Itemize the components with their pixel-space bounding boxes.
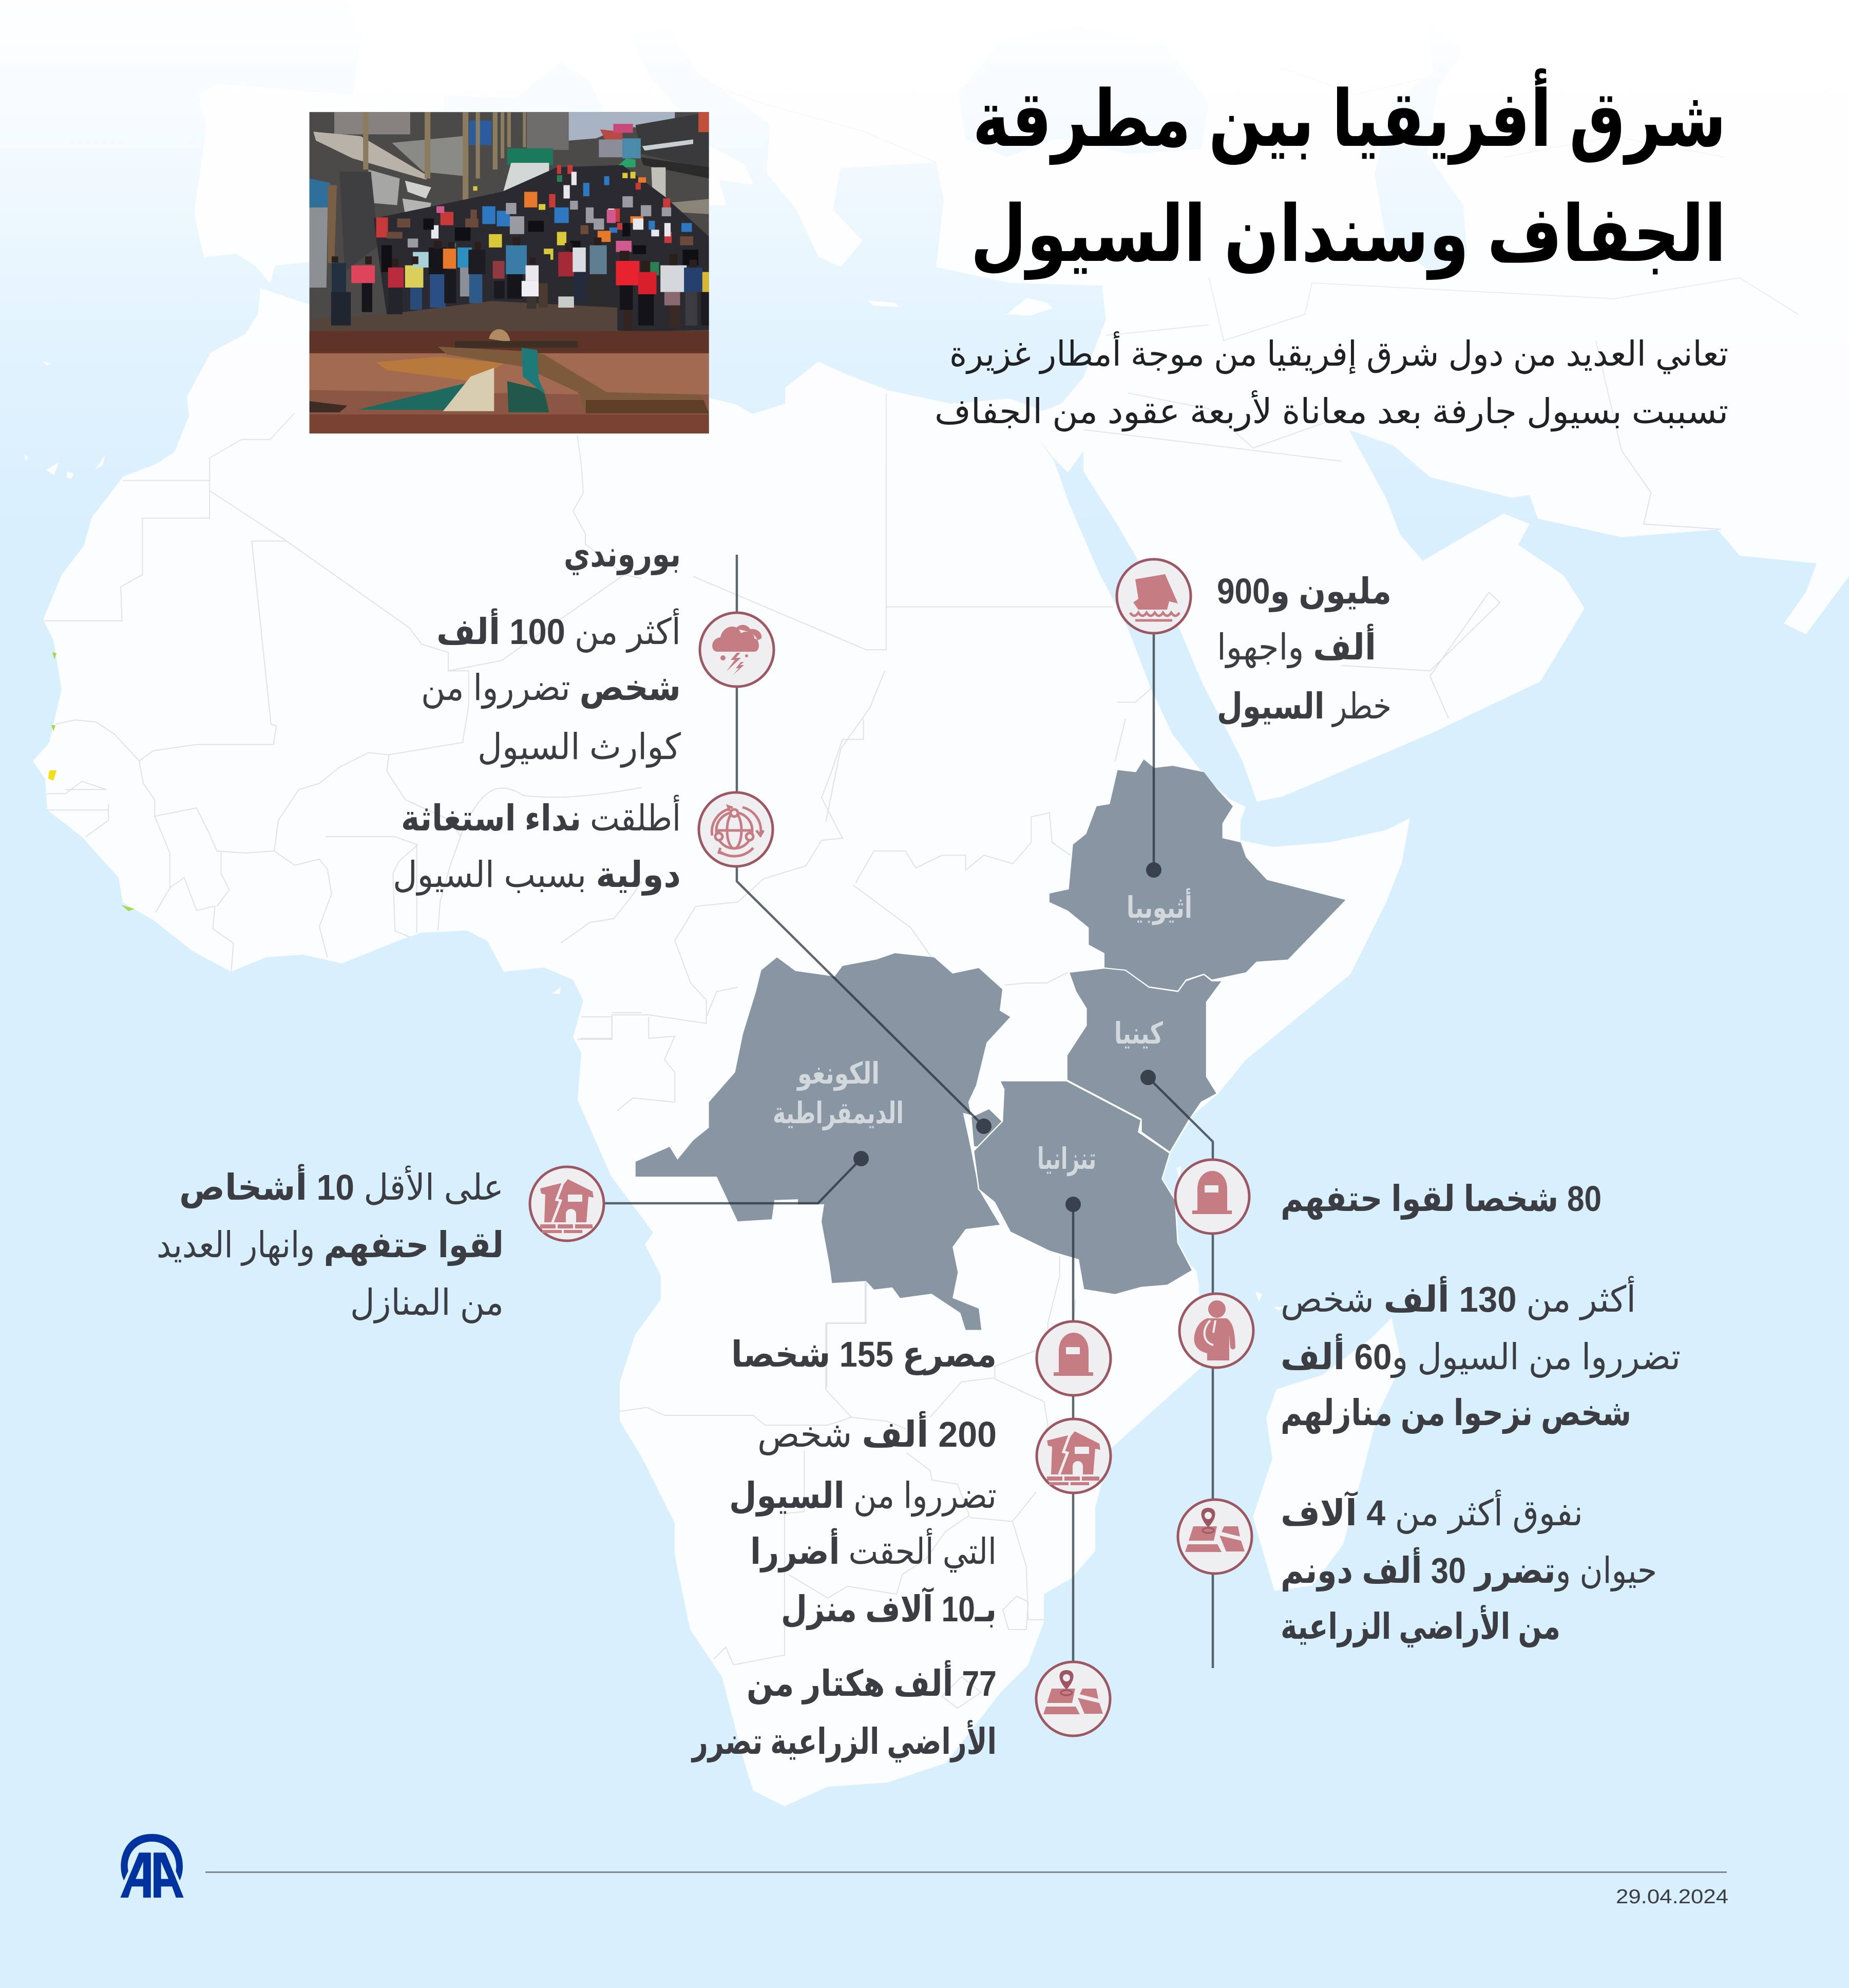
text block: Ethiopia: مليون و900 [1217,571,1391,612]
text block: Tanzania: بـ10 آلاف منزل [781,1587,997,1630]
text block: Kenya: من الأراضي الزراعية [1281,1605,1560,1648]
text block: Kenya: شخص نزحوا من منازلهم [1281,1393,1631,1434]
photo: log and debris [358,329,709,413]
coast speck: yellow [48,770,56,781]
top fade overlay [0,0,1849,539]
country borders: southern Africa [620,1256,1075,1708]
text block: Burundi: بوروندي [564,534,681,575]
text block: Kenya: أكثر من 130 ألف شخص [1281,1276,1636,1320]
text block: Tanzania: 200 ألف شخص [757,1411,997,1455]
photo: background buildings and sky [310,112,709,288]
text block: DR Congo: على الأقل 10 أشخاص [179,1164,504,1209]
country: Burundi [971,1109,1002,1147]
title [970,68,1726,280]
text block: Kenya: 80 شخصا لقوا حتفهم [1281,1179,1602,1220]
country borders: central Africa [581,719,1126,1388]
footer rule [205,1871,1727,1873]
text block: DR Congo [157,1164,504,1323]
photo: front row of people [331,237,709,332]
country: Ethiopia [1050,760,1345,991]
icon: globe with arrows [699,792,773,866]
text block: Tanzania: التي ألحقت أضررا [750,1528,997,1573]
icon: gravestone (Kenya) [1175,1160,1249,1234]
sea: Black Sea [959,26,1209,157]
icon: injured person [1179,1294,1253,1368]
text block: Burundi [393,534,681,896]
text block: Ethiopia: ألف واجهوا [1217,623,1376,669]
date: 29.04.2024 [1616,1886,1728,1908]
icon: flooded house [1117,559,1191,633]
AA logo [120,1834,184,1898]
text block: Tanzania [691,1334,997,1763]
text block: Ethiopia [1217,571,1391,727]
country borders: west Africa [43,413,642,1039]
photo: flood water [310,331,709,433]
country: Tanzania [974,1081,1192,1295]
icon: damaged house (DR Congo) [530,1167,604,1241]
text block: Burundi: كوارث السيول [478,727,681,768]
text block: Ethiopia: خطر السيول [1217,686,1391,727]
country labels: كينيا [1114,1017,1163,1050]
text block: Tanzania: الأراضي الزراعية تضرر [691,1720,997,1763]
country borders: Middle East [693,68,1798,822]
land: Africa [33,257,1410,1806]
land: islands [25,298,1284,1311]
text block: Kenya [1281,1179,1681,1648]
photo: mud bank [311,301,617,333]
text block: DR Congo: لقوا حتفهم وانهار العديد [157,1225,504,1266]
country: DR Congo [636,953,1010,1330]
text block: Burundi: أطلقت نداء استغاثة [401,794,681,838]
icon: damaged house (Tanzania) [1037,1419,1111,1493]
photo: flood crowd in Nairobi [310,112,709,433]
coast speck: green [51,652,135,911]
country labels: الكونغو [796,1057,880,1091]
subtitle: تعاني العديد من دول شرق إفريقيا من موجة أمطار غزيرة [949,331,1728,374]
text block: Tanzania: مصرع 155 شخصا [731,1334,997,1375]
icon: damaged farmland (Kenya) [1178,1500,1252,1574]
text block: Burundi: دولية بسبب السيول [393,855,681,896]
icon: gravestone (Tanzania) [1037,1321,1111,1395]
land: Madagascar [1253,1318,1402,1591]
subtitle: تسببت بسيول جارفة بعد معاناة لأربعة عقود من الجفاف [935,390,1728,432]
photo: crowd [374,165,709,332]
connector lines and dots [567,555,1213,1700]
text block: Burundi: أكثر من 100 ألف [436,608,681,653]
icon: storm cloud [700,613,774,687]
country labels: أثيوبيا [1127,888,1192,925]
country labels: تنزانيا [1037,1142,1096,1177]
text block: Tanzania: تضرروا من السيول [729,1475,997,1517]
text block: DR Congo: من المنازل [350,1282,504,1323]
sea: Caspian Sea [1327,21,1467,272]
text block: Kenya: حيوان وتضرر 30 ألف دونم [1281,1547,1657,1592]
icon: damaged farmland (Tanzania) [1036,1662,1110,1736]
land: Eurasia [194,0,1849,802]
country labels: الديمقراطية [773,1096,904,1131]
text block: Kenya: تضرروا من السيول و60 ألف [1281,1333,1681,1378]
text block: Kenya: نفوق أكثر من 4 آلاف [1281,1489,1583,1534]
text block: Tanzania: 77 ألف هكتار من [747,1660,997,1705]
country: Kenya [1067,968,1223,1152]
country labels [773,888,1192,1177]
text block: Burundi: شخص تضرروا من [421,668,681,709]
subtitle [935,331,1728,432]
